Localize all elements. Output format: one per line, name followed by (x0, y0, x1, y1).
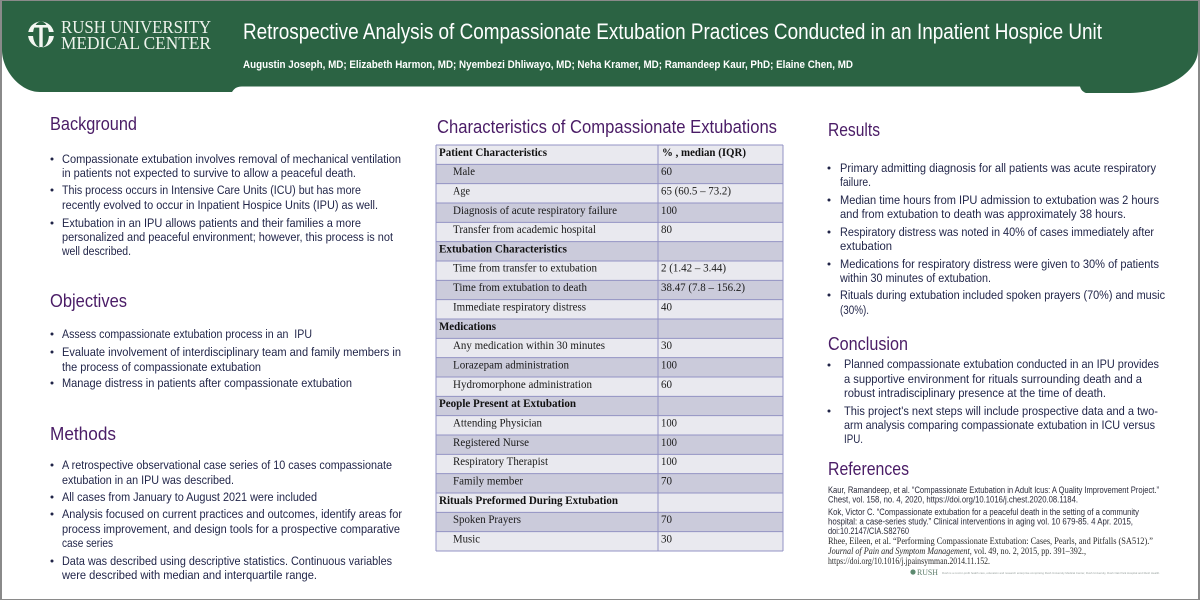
table: characteristics of compassionate extubations: Extubation Characteristics (439, 244, 568, 256)
header banner (2, 1, 1198, 93)
table: characteristics of compassionate extubations: Medications (439, 321, 497, 333)
heading: references: References (828, 458, 909, 479)
text block: reference list: Journal of Pain and Symptom Management, vol. 49, no. 2, 2015, pp. 391–392., (828, 546, 1086, 557)
table: characteristics of compassionate extubations: Attending Physician (453, 418, 542, 430)
text block: background bullets: personalized and peaceful environment; however, this process is not (62, 230, 393, 244)
text block: results bullets: Medications for respiratory distress were given to 30% of patients (840, 257, 1159, 271)
panel: references (828, 458, 1160, 577)
panel: methods (50, 423, 402, 582)
text block: conclusion bullets: a supportive environment for rituals surrounding death and a (844, 372, 1142, 386)
text block: results bullets: (30%). (840, 303, 869, 317)
text block: conclusion bullets: robust intradisciplinary presence at the time of death. (844, 386, 1106, 400)
text block: conclusion bullets: Planned compassionate extubation conducted in an IPU provides (844, 357, 1159, 371)
logo: Rush University Medical Center: MEDICAL CENTER (61, 33, 211, 53)
text block: results bullets: extubation (840, 239, 892, 253)
text block: methods bullets: extubation in an IPU was described. (62, 473, 234, 487)
text block: background bullets: This process occurs in Intensive Care Units (ICU) but has more (62, 183, 361, 197)
text block: results bullets: and from extubation to death was approximately 38 hours. (840, 207, 1126, 221)
text block: conclusion bullets: IPU. (844, 432, 863, 446)
text block: objectives bullets: Manage distress in patients after compassionate extubation (62, 376, 352, 390)
heading: objectives: Objectives (50, 290, 127, 311)
table: characteristics of compassionate extubations: 38.47 (7.8 – 156.2) (661, 282, 745, 294)
table: characteristics of compassionate extubations: 60 (661, 379, 672, 391)
table: characteristics of compassionate extubations: 100 (661, 360, 677, 372)
heading: characteristics: Characteristics of Compassionate Extubations (437, 116, 777, 137)
table: characteristics of compassionate extubations: 100 (661, 437, 677, 449)
footer: Rush wordmark: Rush is a not-for-profit health care, education and research enterprise comprising Rush University Medical Center, Rush University, Rush Oak Park Hospital and Rush Health. (942, 571, 1160, 575)
table: characteristics of compassionate extubations: Family member (453, 476, 523, 488)
text block: results bullets: Median time hours from IPU admission to extubation was 2 hours (840, 193, 1159, 207)
table: characteristics of compassionate extubations: Hydromorphone administration (453, 379, 592, 391)
text block: reference list: Rhee, Eileen, et al. “Performing Compassionate Extubation: Cases, Pearls, and Pitfalls (SA512).” (828, 536, 1153, 547)
panel: characteristics table (436, 116, 783, 551)
text block: conclusion bullets: This project's next steps will include prospective data and a two- (844, 404, 1158, 418)
panel: background (50, 113, 401, 258)
panel: results (828, 119, 1165, 317)
table: characteristics of compassionate extubations: 100 (661, 456, 677, 468)
table: characteristics of compassionate extubations: Lorazepam administration (453, 360, 569, 372)
text block: methods bullets: were described with median and interquartile range. (61, 568, 317, 582)
table: characteristics of compassionate extubations: Transfer from academic hospital (453, 224, 596, 236)
text block: objectives bullets: Assess compassionate extubation process in an IPU (62, 327, 312, 341)
table: characteristics of compassionate extubations: Patient Characteristics (439, 147, 548, 159)
text block: background bullets: recently evolved to occur in Inpatient Hospice Units (IPU) as well. (62, 198, 378, 212)
text block: results bullets: Rituals during extubation included spoken prayers (70%) and music (840, 288, 1165, 302)
heading: conclusion: Conclusion (828, 333, 908, 354)
text block: background bullets: Extubation in an IPU allows patients and their families a more (62, 216, 361, 230)
text block: reference list: Kok, Victor C. “Compassionate extubation for a peaceful death in the setting of a community (828, 507, 1139, 517)
text block: reference list: https://doi.org/10.1016/j.jpainsymman.2014.11.152. (828, 557, 990, 567)
table: characteristics of compassionate extubations: 80 (661, 224, 672, 236)
text block: results bullets: Respiratory distress was noted in 40% of cases immediately after (840, 225, 1154, 239)
table: characteristics of compassionate extubations: 100 (661, 418, 677, 430)
panel: objectives (50, 290, 401, 390)
table: characteristics of compassionate extubations: Age (453, 186, 470, 198)
text block: results bullets (828, 161, 1165, 317)
text block: background bullets: in patients not expected to survive to allow a peaceful death. (62, 166, 356, 180)
text block: background bullets (50, 152, 401, 258)
table: characteristics of compassionate extubations: Time from extubation to death (453, 282, 587, 294)
authors: Augustin Joseph, MD; Elizabeth Harmon, MD; Nyembezi Dhliwayo, MD; Neha Kramer, MD; Ramandeep Kaur, PhD; Elaine Chen, MD (243, 59, 853, 71)
text block: objectives bullets: the process of compassionate extubation (62, 360, 261, 374)
panel: conclusion (828, 333, 1159, 446)
logo: Rush University Medical Center: RUSH UNIVERSITY (61, 17, 211, 37)
table: characteristics of compassionate extubations: Male (453, 166, 475, 178)
text block: conclusion bullets: arm analysis comparing compassionate extubation in ICU versus (844, 418, 1155, 432)
text block: background bullets: well described. (61, 244, 131, 258)
table: characteristics of compassionate extubations: 2 (1.42 – 3.44) (661, 262, 726, 274)
heading: background: Background (50, 113, 137, 134)
table: characteristics of compassionate extubations: 60 (661, 166, 672, 178)
text block: conclusion bullets (828, 357, 1159, 446)
table: characteristics of compassionate extubations: People Present at Extubation (439, 398, 577, 410)
table: characteristics of compassionate extubations: % , median (IQR) (662, 147, 746, 159)
table: characteristics of compassionate extubations: 40 (661, 302, 672, 314)
text block: methods bullets: case series (62, 536, 113, 550)
text block: background bullets: Compassionate extubation involves removal of mechanical ventilation (62, 152, 401, 166)
text block: results bullets: within 30 minutes of extubation. (839, 271, 991, 285)
text block: methods bullets: All cases from January to August 2021 were included (62, 490, 317, 504)
table: characteristics of compassionate extubations: Registered Nurse (453, 437, 529, 449)
text block: methods bullets: Data was described using descriptive statistics. Continuous variables (62, 554, 392, 568)
table: characteristics of compassionate extubations: Time from transfer to extubation (453, 262, 597, 274)
text block: methods bullets: Analysis focused on current practices and outcomes, identify areas for (62, 507, 402, 521)
table: characteristics of compassionate extubations: Music (453, 534, 480, 546)
logo: Rush University Medical Center (27, 17, 211, 53)
table: characteristics of compassionate extubations (436, 145, 783, 551)
text block: reference list: doi:10.2147/CIA.S82760 (828, 526, 909, 536)
footer: Rush wordmark (910, 568, 1160, 577)
table: characteristics of compassionate extubations: Any medication within 30 minutes (453, 340, 605, 352)
text block: methods bullets: process improvement, and design tools for a prospective comparative (62, 522, 400, 536)
table: characteristics of compassionate extubations: 30 (661, 340, 672, 352)
text block: results bullets: Primary admitting diagnosis for all patients was acute respiratory (840, 161, 1157, 175)
table: characteristics of compassionate extubations: Rituals Preformed During Extubation (439, 495, 619, 507)
text block: results bullets: failure. (840, 175, 871, 189)
text block: reference list (828, 485, 1159, 567)
text block: methods bullets: A retrospective observational case series of 10 cases compassionate (62, 458, 392, 472)
table: characteristics of compassionate extubations: 30 (661, 534, 672, 546)
footer: Rush wordmark: RUSH (917, 568, 938, 577)
text block: reference list: hospital: a case-series study.” Clinical interventions in aging vol. 10 679-85. 4 Apr. 2015, (828, 516, 1133, 526)
table: characteristics of compassionate extubations: 70 (661, 514, 672, 526)
icon: Rush emblem (27, 22, 55, 48)
heading: results: Results (828, 119, 880, 140)
table: characteristics of compassionate extubations: Immediate respiratory distress (453, 302, 586, 314)
heading: methods: Methods (50, 423, 116, 444)
table: characteristics of compassionate extubations: Spoken Prayers (453, 514, 521, 526)
text block: objectives bullets: Evaluate involvement of interdisciplinary team and family members in (62, 345, 401, 359)
table: characteristics of compassionate extubations: Respiratory Therapist (453, 456, 549, 468)
text block: reference list: Chest, vol. 158, no. 4, 2020, https://doi.org/10.1016/j.chest.2020.08.1184. (828, 494, 1078, 504)
table: characteristics of compassionate extubations: Diagnosis of acute respiratory failure (453, 205, 617, 217)
table: characteristics of compassionate extubations: 65 (60.5 – 73.2) (661, 186, 731, 198)
text block: methods bullets (50, 458, 402, 582)
table: characteristics of compassionate extubations: 100 (661, 205, 677, 217)
table: characteristics of compassionate extubations: 70 (661, 476, 672, 488)
text block: objectives bullets (50, 327, 401, 390)
